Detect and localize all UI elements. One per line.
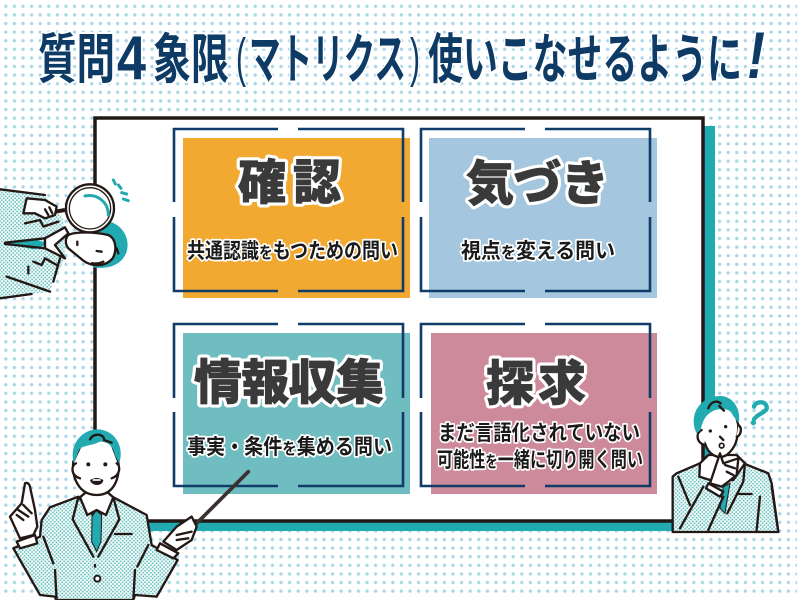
panel: 気づき: 気づき (466, 158, 609, 211)
panel: 情報収集: 情報収集 (194, 357, 384, 410)
panel: 探求: まだ言語化されていない (438, 422, 640, 445)
title: ( (236, 28, 246, 88)
panel: 情報収集: 事実・条件を集める問い (187, 435, 392, 459)
board (95, 118, 715, 531)
panel: 気づき: 視点を変える問い (461, 240, 615, 263)
title: 4 (117, 24, 146, 93)
icon: presenter man with pointer (10, 429, 248, 600)
panel: 情報収集 (174, 324, 410, 494)
panel: 確認: 確認 (238, 157, 341, 210)
title: マトリクス (249, 30, 406, 90)
title: 質問 (38, 30, 115, 90)
panel: 情報収集: 情報収集 (194, 357, 384, 410)
panel: 気づき: 気づき (466, 158, 609, 211)
panel: 確認: 共通認識をもつための問い (187, 240, 398, 263)
title: 象限 (153, 30, 229, 90)
title (38, 18, 765, 93)
panel: 気づき (421, 129, 657, 298)
panel: 確認 (174, 129, 410, 298)
icon: thinking man with question mark (673, 396, 778, 532)
title: ! (747, 18, 765, 92)
panel: 確認: 確認 (238, 157, 341, 210)
panel: 探求: 探求 (486, 358, 586, 411)
panel: 探求: 可能性を一緒に切り開く問い (437, 449, 643, 472)
title: ) (410, 28, 420, 88)
panel: 探求: 探求 (486, 358, 586, 411)
icon: man with magnifying glass (0, 180, 128, 298)
panel: 探求 (421, 324, 657, 494)
